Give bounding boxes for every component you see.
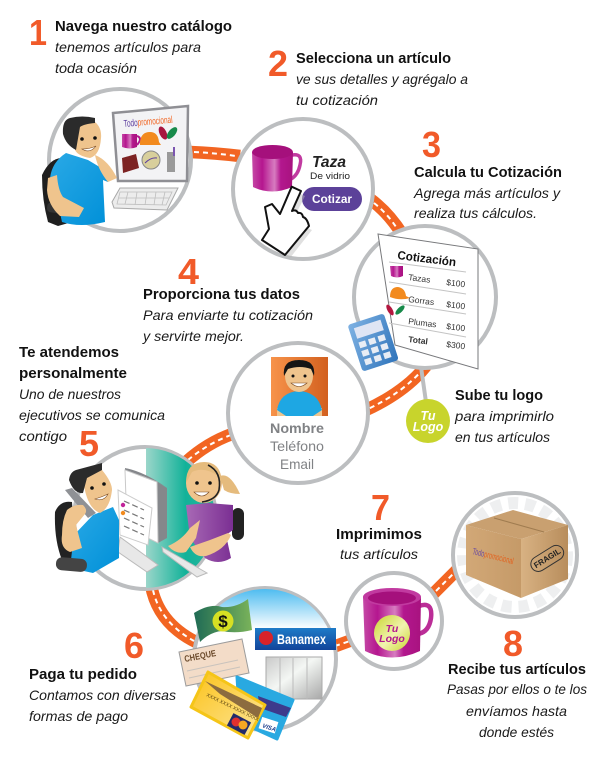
step 7 text [336, 527, 422, 562]
step 8 text: envíamos hasta [466, 703, 567, 719]
quote sheet [378, 234, 478, 369]
quote sheet: $100 [446, 321, 466, 333]
number 3: 3 [422, 124, 441, 165]
number 6: 6 [124, 625, 144, 666]
step 6 text: Paga tu pedido [29, 667, 137, 683]
contact fields [270, 420, 324, 472]
step 2 text [296, 51, 468, 108]
icon: man at desk [42, 116, 117, 226]
step 5 text: Uno de nuestros [19, 386, 121, 402]
connector line [421, 367, 426, 402]
icon: cardboard box: Todopromocional [472, 546, 515, 566]
step 7 text: tus artículos [340, 546, 418, 562]
quote sheet: $100 [446, 277, 466, 289]
quote sheet: Plumas [408, 316, 437, 329]
ring 5 [74, 447, 216, 589]
contact fields: Nombre [270, 420, 324, 436]
step 5 text: ejecutivos se comunica [19, 407, 165, 423]
ring 4 [228, 343, 368, 483]
icon: keyboard [112, 188, 178, 210]
road: connecting route between steps [151, 152, 458, 647]
bank sign: Banamex [277, 631, 326, 647]
quote sheet: $100 [446, 299, 466, 311]
step 5 text: personalmente [19, 366, 127, 382]
product label: Taza [312, 154, 346, 171]
step 3 text [413, 165, 562, 221]
number 1: 1 [29, 12, 47, 53]
button: cotizar [302, 187, 362, 211]
step 3 text: realiza tus cálculos. [414, 205, 537, 221]
step 5: personal attention [19, 345, 244, 590]
step 2 text: tu cotización [296, 92, 378, 108]
ring 7 [346, 573, 442, 669]
number 5: 5 [79, 423, 99, 464]
icon: monitor [125, 468, 167, 543]
ring 6 [194, 588, 336, 730]
logo text: en tus artículos [455, 429, 550, 445]
step 5 text [19, 345, 165, 444]
ring 2 [233, 119, 373, 259]
step 3: calculate quote [348, 124, 562, 372]
step 4 text: y servirte mejor. [142, 328, 244, 344]
contact fields: Email [280, 456, 314, 472]
icon: blue credit card: VISA [261, 723, 277, 733]
step 1 text: tenemos artículos para [55, 39, 201, 55]
icon: printed mug: Tu [386, 623, 399, 635]
icon: printed mug: Logo [379, 633, 405, 645]
icon: printed mug [363, 588, 431, 658]
upload logo [406, 367, 554, 445]
quote paper [118, 490, 152, 545]
quote sheet: Cotización [397, 248, 457, 269]
bank sign [255, 628, 336, 650]
quote sheet: Tazas [408, 272, 431, 285]
step 2: select an article [233, 43, 468, 259]
logo text: para imprimirlo [454, 408, 554, 424]
icon: tu logo badge: Tu [420, 409, 436, 423]
keyboards [118, 537, 207, 577]
step 8: receive items [447, 493, 587, 740]
step 6 text [29, 667, 176, 724]
step 7 text: Imprimimos [336, 527, 422, 543]
icon: mug [252, 145, 301, 192]
number 4: 4 [178, 251, 199, 292]
step 5 text: Te atendemos [19, 345, 119, 361]
step 8 text: Pasas por ellos o te los [447, 681, 587, 697]
icon: calculator [348, 313, 399, 372]
step 8 text [447, 662, 587, 740]
quote sheet: Total [408, 334, 429, 346]
step 4 text: Proporciona tus datos [143, 287, 300, 303]
icon: banknote: $ [218, 612, 228, 631]
step 6 text: formas de pago [29, 708, 128, 724]
step 1 text: toda ocasión [55, 60, 137, 76]
icon: computer monitor with catalogue: Todopromocional [123, 115, 173, 130]
ring 3 [354, 226, 496, 368]
icon: cardboard box [466, 510, 568, 598]
quote sheet: $300 [446, 339, 466, 351]
step 4 text [142, 287, 313, 344]
icon: cheque: CHEQUE [183, 648, 217, 664]
icon: profile portrait [271, 357, 328, 416]
step 8 text: donde estés [479, 724, 554, 740]
contact fields: Teléfono [270, 438, 324, 454]
number 7: 7 [371, 487, 390, 528]
step 4 text: Para enviarte tu cotización [143, 307, 313, 323]
bank building [266, 657, 322, 699]
ring 1 [49, 89, 191, 231]
ring 8 [453, 493, 577, 617]
sky background [219, 589, 328, 628]
product label: De vidrio [310, 171, 350, 182]
step 5 text: contigo [19, 428, 67, 444]
logo text: Sube tu logo [455, 388, 543, 404]
quote sheet: Gorras [408, 294, 435, 307]
icon: banknote [194, 599, 252, 642]
button: cotizar: Cotizar [312, 192, 352, 206]
logo text [454, 388, 554, 445]
step 2 text: ve sus detalles y agrégalo a [296, 71, 468, 87]
product label [310, 154, 350, 182]
number 2: 2 [268, 43, 288, 84]
step 8 text: Recibe tus artículos [448, 662, 586, 678]
step 6 text: Contamos con diversas [29, 687, 176, 703]
icon: hand cursor [262, 187, 312, 258]
step 4: provide details [142, 251, 368, 483]
step 6: pay your order [29, 588, 336, 739]
step 1 text: Navega nuestro catálogo [55, 19, 232, 35]
icon: cardboard box: FRAGIL [532, 547, 562, 570]
icon: yellow credit card: XXXX XXXX XXXX XXXX [205, 692, 260, 723]
starburst rim [463, 503, 567, 607]
number 8: 8 [503, 623, 523, 664]
step 1: browse catalogue [29, 12, 232, 231]
icon: computer monitor with catalogue [113, 106, 188, 181]
step 1 text [55, 19, 232, 76]
icon: tu logo badge: Logo [413, 420, 444, 434]
icon: tu logo badge [406, 399, 450, 443]
step 3 text: Agrega más artículos y [413, 185, 561, 201]
icon: man on phone [55, 463, 119, 573]
teal wall [146, 447, 218, 590]
icon: yellow credit card [191, 672, 265, 738]
step 7: printing [336, 487, 442, 669]
icon: cheque [179, 639, 249, 686]
step 2 text: Selecciona un artículo [296, 51, 451, 67]
icon: blue credit card [237, 677, 293, 739]
icon: woman with headset [168, 462, 244, 562]
step 3 text: Calcula tu Cotización [414, 165, 562, 181]
